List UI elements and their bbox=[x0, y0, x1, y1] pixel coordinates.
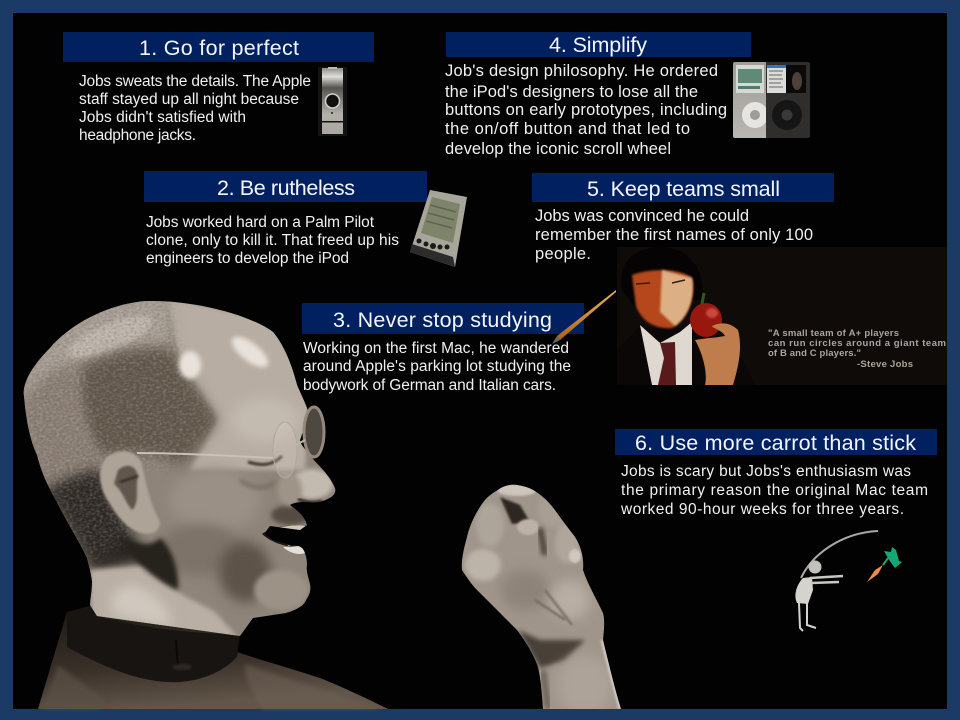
text block 2: clone, only to kill it. That freed up his bbox=[146, 232, 399, 249]
text block 4: the iPod's designers to lose all the bbox=[445, 83, 698, 101]
panel: tip 4 simplify bbox=[445, 32, 810, 158]
panel: tip 1 go for perfect bbox=[63, 32, 374, 144]
text block 4: the on/off button and that led to bbox=[445, 120, 690, 138]
ear bbox=[100, 451, 160, 534]
text block 3 bbox=[303, 340, 571, 394]
photo: young Jobs with apple and quote bbox=[617, 247, 947, 385]
raised hand bbox=[462, 484, 621, 709]
nose bbox=[291, 469, 333, 499]
suit bbox=[617, 328, 755, 385]
forehead highlights bbox=[179, 351, 201, 379]
heading 4: 4. Simplify bbox=[549, 33, 647, 57]
heading 4 bbox=[446, 32, 751, 57]
heading 5: 5. Keep teams small bbox=[587, 177, 780, 201]
text block 4: develop the iconic scroll wheel bbox=[445, 140, 671, 158]
heading 3 bbox=[302, 303, 584, 334]
heading 1 bbox=[63, 32, 374, 62]
text block 4 bbox=[445, 62, 727, 158]
shirt and collar bbox=[38, 605, 388, 709]
text block 6: the primary reason the original Mac team bbox=[621, 482, 928, 499]
wrist shadow bbox=[518, 630, 585, 668]
head bbox=[15, 290, 345, 640]
icon: headphone jack bbox=[318, 67, 347, 136]
heading 3: 3. Never stop studying bbox=[333, 308, 552, 332]
text block 1: Jobs sweats the details. The Apple bbox=[79, 73, 311, 90]
hair texture bbox=[25, 301, 212, 564]
text block 1 bbox=[79, 73, 311, 144]
text block 6 bbox=[620, 463, 928, 518]
heading 2: 2. Be rutheless bbox=[217, 176, 355, 200]
cheek and beard shading bbox=[174, 465, 256, 526]
icon: man chasing carrot on a stick bbox=[795, 531, 902, 631]
icon: two iPods bbox=[733, 62, 810, 138]
text block 2: Jobs worked hard on a Palm Pilot bbox=[146, 214, 375, 231]
hair: dark nape bbox=[45, 470, 150, 572]
heading 5 bbox=[532, 173, 834, 202]
shirt bbox=[640, 322, 692, 385]
icon: Palm Pilot bbox=[410, 190, 467, 267]
bald forehead bbox=[167, 298, 310, 470]
text block 3: around Apple's parking lot studying the bbox=[303, 358, 571, 375]
text block 1: Jobs didn't satisfied with bbox=[79, 109, 246, 126]
text block 5: remember the first names of only 100 bbox=[535, 226, 813, 244]
text block 6: worked 90-hour weeks for three years. bbox=[620, 501, 904, 518]
panel: tip 6 use more carrot than stick bbox=[615, 429, 937, 631]
neck bbox=[90, 565, 240, 640]
text block 3: bodywork of German and Italian cars. bbox=[303, 377, 556, 394]
quote: -Steve Jobs bbox=[857, 359, 913, 370]
text block 2: engineers to develop the iPod bbox=[146, 250, 349, 267]
text block 5: Jobs was convinced he could bbox=[535, 207, 749, 225]
panel: tip 5 keep teams small bbox=[532, 173, 947, 385]
panel: tip 2 be rutheless bbox=[144, 171, 467, 267]
quote: of B and C players." bbox=[768, 348, 861, 359]
panel: tip 3 never stop studying bbox=[302, 290, 616, 394]
tie bbox=[658, 342, 676, 385]
eye crease bbox=[248, 456, 282, 464]
apple bbox=[690, 303, 722, 337]
text block 3: Working on the first Mac, he wandered bbox=[303, 340, 569, 357]
mouth bbox=[262, 525, 308, 548]
text block 5: people. bbox=[535, 245, 591, 263]
quote: "A small team of A+ players bbox=[768, 328, 899, 339]
finger and palm shading bbox=[465, 549, 501, 581]
quote bbox=[768, 330, 946, 367]
text block 4: buttons on early prototypes, including bbox=[445, 101, 727, 119]
hair: dark side patch bbox=[79, 349, 217, 465]
text block 6: Jobs is scary but Jobs's enthusiasm was bbox=[621, 463, 911, 480]
glasses bbox=[137, 407, 324, 478]
hand bbox=[695, 323, 740, 385]
quote: can run circles around a giant team bbox=[768, 338, 946, 349]
hair: light crown bbox=[22, 296, 172, 400]
mustache bbox=[271, 505, 311, 525]
icon: pencil bbox=[552, 290, 616, 344]
heading 1: 1. Go for perfect bbox=[139, 36, 299, 60]
heading 2 bbox=[144, 171, 427, 202]
text block 1: staff stayed up all night because bbox=[79, 91, 299, 108]
face bbox=[632, 270, 693, 328]
under-ear shadow bbox=[118, 535, 178, 590]
heading 6: 6. Use more carrot than stick bbox=[635, 431, 916, 455]
text block 2 bbox=[146, 214, 399, 267]
text block 5 bbox=[535, 207, 813, 263]
text block 1: headphone jacks. bbox=[79, 127, 196, 144]
photo: laughing Steve Jobs portrait bbox=[15, 290, 625, 715]
hair bbox=[621, 247, 703, 308]
text block 4: Job's design philosophy. He ordered bbox=[445, 62, 718, 80]
